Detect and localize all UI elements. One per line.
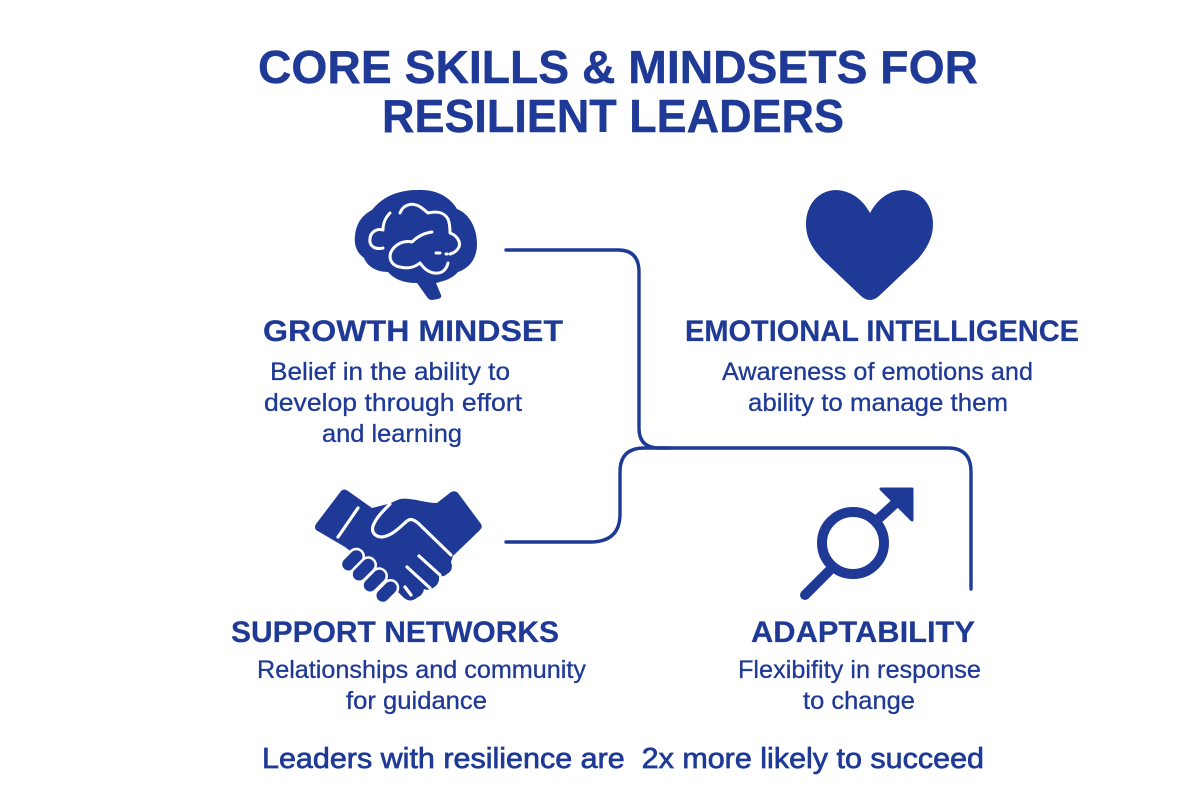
icon: circle with arrow xyxy=(805,489,912,595)
heading: EMOTIONAL INTELLIGENCE xyxy=(685,315,1079,348)
panel: support networks xyxy=(231,490,586,715)
description xyxy=(722,358,1033,417)
description: Awareness of emotions and xyxy=(722,358,1033,386)
panel: emotional intelligence xyxy=(685,190,1079,417)
heading: SUPPORT NETWORKS xyxy=(231,616,559,649)
description: Belief in the ability to xyxy=(270,358,510,386)
description: ability to manage them xyxy=(748,389,1008,417)
description xyxy=(264,358,522,448)
title: RESILIENT LEADERS xyxy=(382,90,844,142)
description: and learning xyxy=(322,420,462,448)
icon: brain xyxy=(355,190,477,300)
icon: handshake xyxy=(315,490,482,606)
description xyxy=(257,656,586,715)
connector arrows xyxy=(506,250,971,589)
description xyxy=(738,656,981,715)
icon: heart xyxy=(806,190,933,300)
description: to change xyxy=(803,687,915,715)
heading: ADAPTABILITY xyxy=(751,616,975,649)
description: for guidance xyxy=(346,687,487,715)
panel: growth mindset xyxy=(263,190,563,448)
heading: GROWTH MINDSET xyxy=(263,315,563,348)
panel: adaptability xyxy=(738,489,981,715)
title: CORE SKILLS & MINDSETS FOR xyxy=(258,41,978,93)
description: develop through effort xyxy=(264,389,522,417)
description: Flexibifity in response xyxy=(738,656,981,684)
footer statistic: Leaders with resilience are 2x more likely to succeed xyxy=(262,743,984,775)
title xyxy=(258,41,978,142)
description: Relationships and community xyxy=(257,656,586,684)
